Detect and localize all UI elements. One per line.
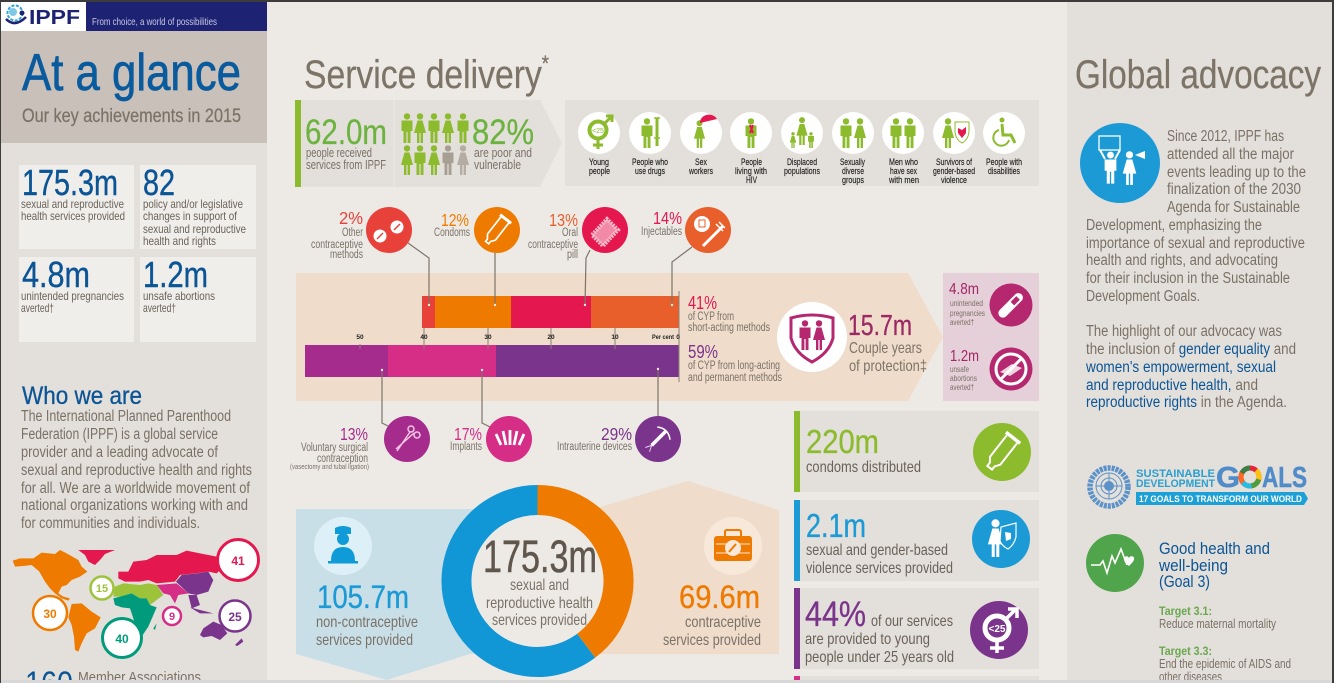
stat: 69.6m: contraceptive xyxy=(685,614,761,631)
group: sexually diverse groups: Sexually xyxy=(840,157,865,168)
stat: 69.6m: 69.6m xyxy=(679,579,760,615)
map marker: 41 Europe: 41 xyxy=(231,554,245,568)
stat: 1.2m unsafe abortions: averted† xyxy=(950,383,974,392)
donut chart: 175.3m services: services provided xyxy=(492,612,587,629)
label: 41% short-acting: 41% xyxy=(688,293,717,313)
card: gender-based violence services: 2.1m xyxy=(806,507,866,544)
stat: 105.7m xyxy=(316,579,418,649)
stat: 4.8m unintended pregnancies: averted† xyxy=(950,318,974,327)
stat: 4.8m pregnancies: 4.8m xyxy=(22,254,90,295)
donut chart: 175.3m services: reproductive health xyxy=(486,595,593,612)
group: men who have sex with men: have sex xyxy=(890,166,917,177)
card: young people share: are provided to young xyxy=(805,631,930,648)
stat: 175.3m services: sexual and reproductive xyxy=(21,197,124,211)
card: young people share: 44% xyxy=(805,595,866,634)
title: At a glance: At a glance xyxy=(22,44,241,102)
stat: 15.7m couple years: of protection‡ xyxy=(849,358,927,375)
icon: no unsafe abortion xyxy=(990,348,1032,390)
bar chart: short-acting and long-acting methods: Per cent xyxy=(652,334,675,341)
donut chart: 175.3m services xyxy=(442,485,634,677)
group: people who use drugs xyxy=(629,112,671,177)
logo: Sustainable Development Goals: DEVELOPMENT xyxy=(1136,478,1215,490)
stat: 82 policy changes: 82 xyxy=(143,162,175,203)
panel: contraceptive services xyxy=(590,481,779,654)
map marker: 40 Africa: 40 xyxy=(115,632,129,646)
text: advocacy intro: health and rights, and advocating xyxy=(1086,252,1278,269)
title: At a glance: Our key achievements in 2015 xyxy=(22,106,241,127)
text: target 3.3: End the epidemic of AIDS and xyxy=(1159,657,1291,671)
leader lines xyxy=(381,243,692,427)
heading: Good health and well-being: Good health and xyxy=(1159,539,1270,558)
method: oral pill 13%: 13% xyxy=(549,210,578,230)
group: displaced populations: Displaced xyxy=(787,157,817,168)
text: advocacy intro: finalization of the 2030 xyxy=(1167,181,1301,198)
stat: 82%: are poor and xyxy=(474,146,532,160)
stat: 62.0m xyxy=(305,113,387,172)
stat: 82 policy changes xyxy=(140,162,256,249)
stat: 4.8m pregnancies: averted† xyxy=(21,301,54,315)
group: men who have sex with men: Men who xyxy=(889,157,918,168)
icon: health pulse and heart xyxy=(1086,534,1144,592)
icon: nurse xyxy=(314,517,372,575)
logo: Sustainable Development Goals: 17 GOALS TO TRANSFORM OUR WORLD xyxy=(1139,494,1302,505)
stat: 1.2m abortions xyxy=(140,254,256,342)
text: target 3.1 xyxy=(1159,604,1277,631)
icon: advocates with placard and megaphone xyxy=(1080,123,1160,203)
map marker: 40 Africa xyxy=(102,618,142,658)
label: 41% short-acting: short-acting methods xyxy=(688,322,770,334)
tagline banner: From choice, a world of possibilities xyxy=(92,16,217,28)
card: gender-based violence services xyxy=(794,500,1039,581)
method: condoms 12%: Condoms xyxy=(434,227,470,239)
logo: Sustainable Development Goals: ALS xyxy=(1262,462,1307,494)
stat: 69.6m xyxy=(663,579,761,649)
stat: 4.8m unintended pregnancies: pregnancies xyxy=(950,309,985,318)
method: implants 17%: 17% xyxy=(454,424,482,444)
icon: pregnancy test xyxy=(981,275,1041,335)
label: 59% long-acting: and permanent methods xyxy=(688,372,782,384)
stat: 4.8m pregnancies xyxy=(19,254,134,342)
label: 41% short-acting xyxy=(688,293,770,334)
group: sex workers: Sex xyxy=(695,157,707,168)
map marker: 9 South Asia xyxy=(163,607,181,625)
method: voluntary surgical contraception 13%: 13% xyxy=(340,424,368,444)
group: people living with HIV xyxy=(730,112,772,186)
text: advocacy intro xyxy=(1086,128,1306,305)
tagline banner xyxy=(86,2,267,31)
text: who we are body: for all. We are a worldwide movement of xyxy=(21,480,251,497)
stat: 15.7m couple years: 15.7m xyxy=(848,310,912,342)
stat: 69.6m: services provided xyxy=(663,632,761,649)
method: intrauterine devices 29% xyxy=(557,416,681,462)
panel: people reached arrow xyxy=(295,100,562,187)
heading: Good health and well-being: well-being xyxy=(1158,556,1228,575)
label: 59% long-acting: of CYP from long-acting xyxy=(688,360,780,372)
method: intrauterine devices 29%: 29% xyxy=(601,424,632,444)
text: who we are body: national organizations working with and xyxy=(21,497,248,514)
heading: Good health and well-being xyxy=(1158,539,1270,591)
heading: Service delivery: Service delivery xyxy=(304,53,586,97)
stat: 1.2m abortions: 1.2m xyxy=(143,254,208,295)
method: other contraceptive methods 2%: contraceptive xyxy=(311,239,363,251)
group: survivors of violence: violence xyxy=(941,175,967,186)
label: 59% long-acting: 59% xyxy=(688,342,718,362)
heading: Good health and well-being: (Goal 3) xyxy=(1159,572,1210,591)
bar chart: short-acting and long-acting methods xyxy=(305,291,680,382)
stat: 15.7m couple years: Couple years xyxy=(849,340,922,357)
method: implants 17%: Implants xyxy=(450,441,482,453)
method: other contraceptive methods 2% xyxy=(311,207,412,261)
method: voluntary surgical contraception 13%: (vasectomy and tubal ligation) xyxy=(290,464,369,471)
group: sex workers: workers xyxy=(688,166,713,177)
label: 41% short-acting: of CYP from xyxy=(688,311,734,323)
map marker: 9 South Asia: 9 xyxy=(169,611,175,623)
bar chart: short-acting and long-acting methods: 0 xyxy=(676,334,680,341)
stat: 1.2m unsafe abortions: 1.2m xyxy=(950,348,979,365)
group: young people: people xyxy=(589,166,610,177)
text: who we are body: The International Planned Parenthood xyxy=(21,408,231,425)
text: who we are body: Federation (IPPF) is a global service xyxy=(21,426,218,443)
text: advocacy intro: events leading up to the xyxy=(1167,164,1306,181)
method: voluntary surgical contraception 13%: contraception xyxy=(317,453,368,465)
world map xyxy=(13,550,243,652)
panel: averted outcomes xyxy=(943,273,1041,401)
stat: 105.7m: non-contraceptive xyxy=(316,614,418,631)
text: advocacy highlight: the inclusion of gender equality and xyxy=(1086,341,1296,358)
card: young people share: <25 xyxy=(989,624,1006,635)
label: 59% long-acting xyxy=(688,342,782,384)
method: injectables 14% xyxy=(641,207,731,253)
group: survivors of violence xyxy=(933,112,975,186)
stat: 175.3m services: 175.3m xyxy=(22,162,118,203)
stat: 4.8m unintended pregnancies: unintended xyxy=(950,299,983,308)
group: young people xyxy=(578,112,620,177)
stat: 1.2m unsafe abortions xyxy=(950,348,979,392)
card: condoms distributed: 220m xyxy=(806,423,879,460)
bar chart: short-acting and long-acting methods: 20 xyxy=(547,334,555,341)
donut chart: 175.3m services: sexual and xyxy=(510,577,569,594)
stat: 4.8m pregnancies: unintended pregnancies xyxy=(21,289,124,303)
group: sexually diverse groups: groups xyxy=(842,175,864,186)
stat: 105.7m: 105.7m xyxy=(317,579,409,615)
method: voluntary surgical contraception 13% xyxy=(290,416,430,471)
text: advocacy intro: attended all the major xyxy=(1167,146,1294,163)
group: survivors of violence: Survivors of xyxy=(936,157,972,168)
group: people living with HIV: HIV xyxy=(746,175,757,186)
icon: contraceptive kit xyxy=(704,517,762,575)
logo: Sustainable Development Goals: SUSTAINABLE xyxy=(1136,468,1215,480)
stat: 15.7m couple years xyxy=(848,310,927,375)
method: other contraceptive methods 2%: 2% xyxy=(339,208,363,228)
method: oral pill 13% xyxy=(528,207,628,261)
method: injectables 14%: Injectables xyxy=(641,226,682,238)
logo: UN emblem xyxy=(1090,468,1128,506)
stat: 82 policy changes: policy and/or legislative xyxy=(143,197,243,211)
group: displaced populations: populations xyxy=(784,166,820,177)
group: sexually diverse groups xyxy=(832,112,874,186)
group: people living with HIV: living with xyxy=(735,166,767,177)
group: people with disabilities: People with xyxy=(986,157,1022,168)
title: At a glance xyxy=(1,31,267,143)
group: people who use drugs: People who xyxy=(632,157,668,168)
card: young people share xyxy=(794,588,1039,669)
panel: right column global advocacy xyxy=(1067,2,1332,683)
stat: 82% xyxy=(472,113,534,172)
card: gender-based violence services: violence services provided xyxy=(806,560,953,577)
method: oral pill 13%: pill xyxy=(567,249,578,261)
panel: left column xyxy=(1,2,267,683)
stat: 1.2m unsafe abortions: abortions xyxy=(950,374,977,383)
text: advocacy intro: Agenda for Sustainable xyxy=(1167,199,1300,216)
text: advocacy highlight: reproductive rights in the Agenda. xyxy=(1086,394,1287,411)
stat: 82 policy changes: sexual and reproductive xyxy=(143,222,246,236)
card: condoms distributed: condoms distributed xyxy=(806,459,921,476)
bar chart: short-acting and long-acting methods: 30 xyxy=(484,334,492,341)
stat: 82 policy changes: changes in support of xyxy=(143,209,238,223)
stat: 160 Member Associations xyxy=(25,665,201,683)
text: who we are body: sexual and reproductive health and rights xyxy=(21,462,252,479)
group: people who use drugs: use drugs xyxy=(635,166,665,177)
stat: 82%: vulnerable xyxy=(474,158,521,172)
method: oral pill 13%: Oral xyxy=(562,227,578,239)
panel: couple years of protection band xyxy=(296,273,943,401)
stat: 175.3m services xyxy=(19,162,134,249)
map marker: 15 Arab world xyxy=(90,576,114,600)
group: men who have sex with men: with men xyxy=(888,175,919,186)
group: sex workers xyxy=(680,112,722,177)
map marker: 25 East Asia xyxy=(220,600,250,632)
text: target 3.3 xyxy=(1159,644,1291,683)
text: advocacy intro: Since 2012, IPPF has xyxy=(1167,128,1284,145)
method: intrauterine devices 29%: Intrauterine devices xyxy=(557,441,632,453)
stat: 62.0m: 62.0m xyxy=(305,113,387,152)
group: young people: Young xyxy=(589,157,609,168)
text: who we are body: provider and a leading advocate of xyxy=(21,444,219,461)
text: target 3.1: Target 3.1: xyxy=(1159,604,1212,618)
heading: Who we are: Who we are xyxy=(22,382,142,410)
method: implants 17% xyxy=(450,416,532,462)
group: men who have sex with men xyxy=(882,112,924,186)
method: other contraceptive methods 2%: Other xyxy=(342,227,363,239)
text: advocacy intro: Development Goals. xyxy=(1086,288,1200,305)
map marker: 30 Americas: 30 xyxy=(43,607,57,621)
bar chart: short-acting and long-acting methods: 50 xyxy=(356,334,364,341)
card: condoms distributed xyxy=(794,411,1039,492)
stat: 4.8m unintended pregnancies: 4.8m xyxy=(949,281,979,298)
card: partly visible next card xyxy=(794,676,1039,683)
group: sexually diverse groups: diverse xyxy=(842,166,864,177)
bar chart: short-acting and long-acting methods: 40 xyxy=(420,334,428,341)
method: condoms 12% xyxy=(434,207,520,253)
panel: target groups xyxy=(565,100,1039,186)
group: people living with HIV: People xyxy=(741,157,762,168)
text: who we are body xyxy=(21,408,252,532)
icon: couple in shield xyxy=(777,302,847,372)
text: advocacy highlight xyxy=(1085,323,1296,411)
method: other contraceptive methods 2%: methods xyxy=(330,249,363,261)
text: target 3.3: Target 3.3: xyxy=(1159,644,1212,658)
method: condoms 12%: 12% xyxy=(441,210,469,230)
text: who we are body: for communities and individuals. xyxy=(21,515,200,532)
stat: 1.2m unsafe abortions: unsafe xyxy=(950,365,969,374)
map marker: 30 Americas xyxy=(33,596,67,630)
bar chart: short-acting and long-acting methods: 10 xyxy=(611,334,619,341)
stat: 82 policy changes: health and rights xyxy=(143,234,216,248)
text: target 3.1: Reduce maternal mortality xyxy=(1159,617,1277,631)
stat: 62.0m: people received xyxy=(306,146,372,160)
group: people with disabilities: disabilities xyxy=(988,166,1020,177)
donut chart: 175.3m services: 175.3m xyxy=(483,531,597,582)
stat: 4.8m unintended pregnancies xyxy=(949,281,985,327)
logo: IPPF: IPPF xyxy=(29,7,80,29)
stat: 62.0m: services from IPPF xyxy=(306,158,386,172)
group: survivors of violence: gender-based xyxy=(933,166,975,177)
card: young people share: of our services xyxy=(871,613,953,630)
stat: 1.2m abortions: unsafe abortions xyxy=(143,289,215,303)
map marker: 25 East Asia: 25 xyxy=(228,610,242,624)
stat: 1.2m abortions: averted† xyxy=(143,301,176,315)
group: people with disabilities xyxy=(983,112,1025,177)
text: advocacy intro: Development, emphasizing the xyxy=(1086,217,1262,234)
group: young people: <25 xyxy=(592,128,604,135)
stat: 105.7m: services provided xyxy=(316,632,413,649)
heading: Service delivery: * xyxy=(542,51,549,76)
map marker: 15 Arab world: 15 xyxy=(96,583,108,595)
card: young people share: people under 25 years old xyxy=(805,649,954,666)
text: advocacy highlight: and reproductive health, and xyxy=(1086,377,1258,394)
method: voluntary surgical contraception 13%: Voluntary surgical xyxy=(301,442,368,454)
card: gender-based violence services: sexual and gender-based xyxy=(806,542,948,559)
icon: people share pictogram xyxy=(401,113,469,175)
method: injectables 14%: 14% xyxy=(653,208,682,228)
logo: IPPF xyxy=(1,2,86,31)
text: advocacy highlight: The highlight of our advocacy was xyxy=(1086,323,1282,340)
map marker: 41 Europe xyxy=(218,540,258,580)
stat: 82%: 82% xyxy=(472,113,534,152)
group: displaced populations xyxy=(781,112,823,177)
logo: Sustainable Development Goals: G xyxy=(1216,462,1240,494)
method: oral pill 13%: contraceptive xyxy=(528,239,578,251)
text: advocacy intro: for their inclusion in the Sustainable xyxy=(1086,270,1290,287)
panel: non-contraceptive services xyxy=(296,509,490,680)
logo: Sustainable Development Goals xyxy=(1136,462,1308,505)
stat: 175.3m services: health services provided xyxy=(21,209,125,223)
text: advocacy highlight: women's empowerment, sexual xyxy=(1085,359,1276,376)
